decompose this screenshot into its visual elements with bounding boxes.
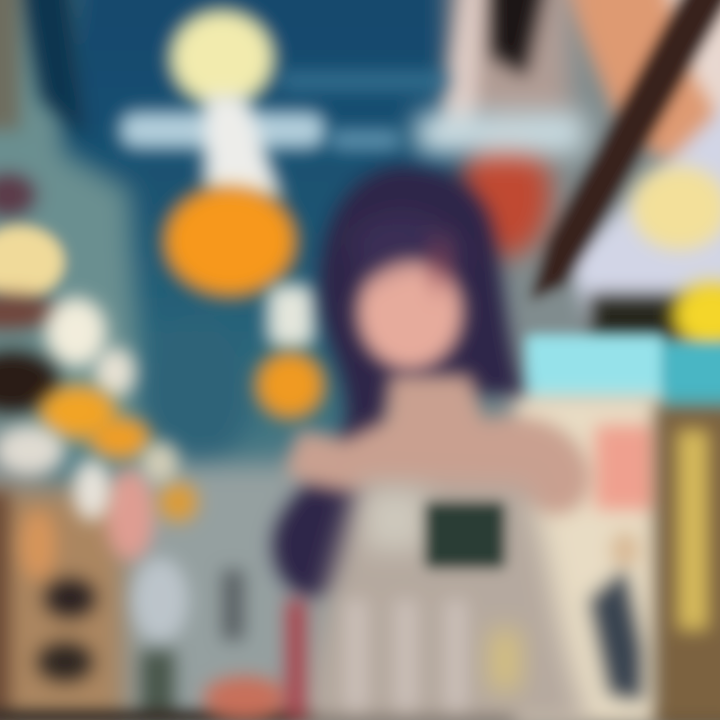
dress <box>300 480 590 720</box>
large orange lantern <box>164 186 296 296</box>
face <box>350 212 465 370</box>
lower arm <box>203 600 520 720</box>
right background structures <box>440 0 720 340</box>
street and lower left ground <box>0 465 720 720</box>
left lanterns and lights <box>0 226 198 522</box>
girl figure <box>203 165 590 720</box>
top lantern <box>170 10 282 200</box>
right lantern <box>632 166 720 349</box>
shoulders and chest <box>285 375 590 515</box>
hair back <box>272 165 525 598</box>
background person <box>590 532 642 700</box>
small orange lantern <box>256 285 324 418</box>
banner glow across sky <box>120 72 585 154</box>
dress dark patch <box>425 502 505 568</box>
right signs <box>515 335 720 720</box>
left buildings <box>0 0 250 470</box>
